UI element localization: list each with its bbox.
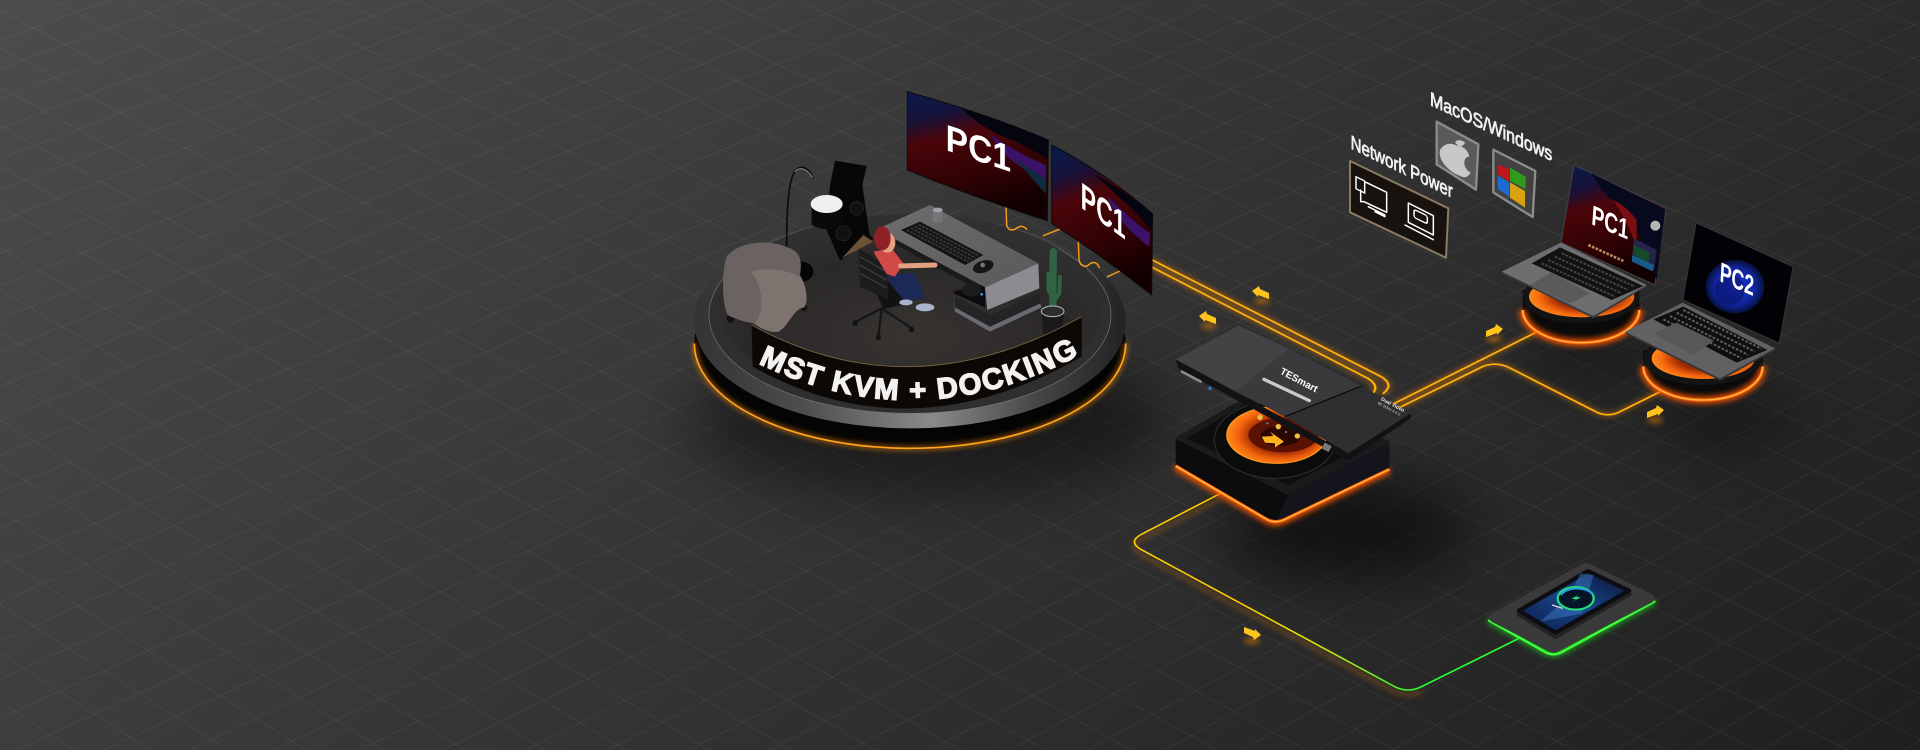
phone — [1519, 571, 1629, 637]
cactus plant — [1041, 252, 1064, 338]
pedestal edge light — [1176, 466, 1389, 522]
platform base with orange light — [694, 214, 1126, 448]
floating OS and feature cards — [1350, 87, 1552, 258]
KVM side label — [1180, 370, 1405, 417]
card: network and power icons — [1350, 161, 1448, 258]
pedestal body — [1176, 397, 1389, 522]
speaker — [827, 161, 873, 261]
office chair — [852, 248, 914, 340]
laptop PC1 on pedestal — [1502, 165, 1666, 343]
KVM ports — [1208, 387, 1332, 452]
laptop PC1 screen — [1561, 165, 1666, 285]
laptop PC1 screen: PC1 — [1591, 200, 1630, 246]
laptop PC2 base — [1625, 303, 1775, 381]
card: Windows — [1493, 150, 1535, 217]
laptop PC1 base — [1502, 243, 1647, 318]
direction arrow: monitor cable upper — [1252, 286, 1270, 304]
pad surface — [1495, 568, 1649, 648]
KVM side label: 8K 60Hz 4:4:4 — [1377, 400, 1402, 417]
KVM logo: TESmart — [1278, 366, 1320, 396]
pad green edge glow — [1489, 601, 1654, 654]
monitor stand cables — [1006, 205, 1120, 277]
label: Network Power: Network Power — [1351, 131, 1453, 202]
laptop PC2 screen: PC2 — [1719, 257, 1755, 303]
label: MacOS/Windows: MacOS/Windows — [1430, 87, 1552, 165]
monitor 2: PC1: PC1 — [1081, 175, 1126, 249]
ground shadows — [690, 330, 1795, 580]
lamp shade — [811, 195, 843, 229]
KVM logo — [1264, 366, 1320, 401]
platform: MST KVM + docking desk scene — [688, 91, 1154, 454]
banner: MST KVM + DOCKING: MST KVM + DOCKING — [759, 340, 1077, 401]
ring with orange arrow — [1214, 402, 1336, 478]
armchair — [723, 242, 807, 332]
monitor 1: PC1 — [907, 92, 1048, 221]
KVM switch on pedestal — [1176, 326, 1411, 522]
mouse and mug — [933, 208, 995, 276]
monitor 1: PC1: PC1 — [946, 116, 1011, 180]
pedestal PC1 — [1523, 270, 1639, 343]
cable: KVM to wireless charging pad — [1134, 493, 1519, 694]
cables: monitors to KVM and KVM to laptops — [1152, 260, 1660, 415]
direction arrow: laptop PC1 cable — [1486, 324, 1503, 342]
keyboard — [901, 222, 983, 265]
direction arrow: charging cable — [1244, 627, 1261, 644]
KVM side label: Dual Video — [1380, 396, 1405, 414]
direction arrow: laptop PC2 cable — [1647, 405, 1664, 423]
monitor 2: PC1 — [1052, 145, 1153, 295]
desk — [877, 205, 1042, 332]
direction arrow: monitor cable lower — [1199, 311, 1217, 329]
laptop PC2 on pedestal — [1625, 223, 1793, 400]
card: Apple — [1437, 122, 1478, 190]
floor lamp — [787, 167, 813, 282]
KVM device body — [1176, 326, 1411, 461]
wireless charging pad with phone — [1489, 568, 1654, 654]
pedestal PC2 — [1643, 332, 1763, 400]
person at desk — [873, 226, 935, 311]
pad edge — [1489, 602, 1654, 654]
laptop PC2 screen — [1683, 223, 1793, 343]
pedestal glow — [1176, 467, 1389, 522]
